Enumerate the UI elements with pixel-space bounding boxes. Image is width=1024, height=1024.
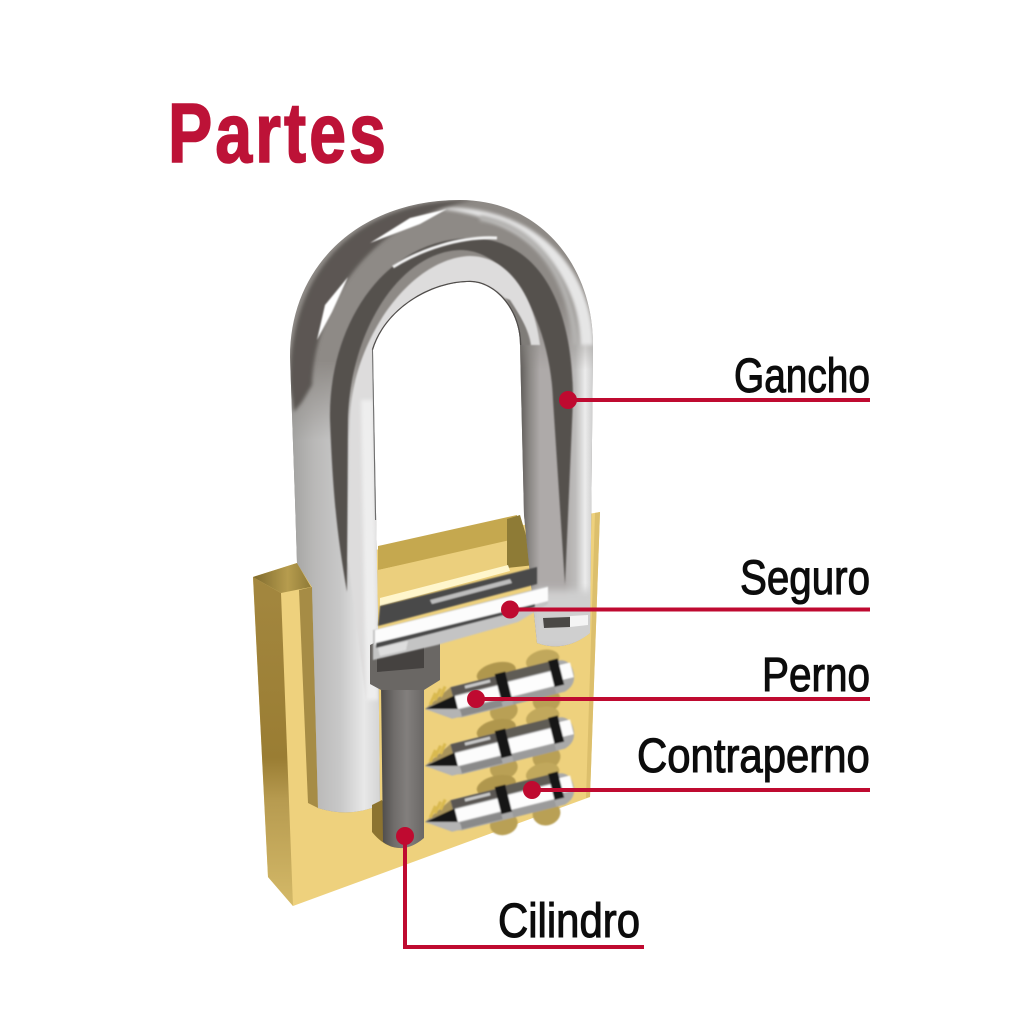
label: Perno: Perno (762, 649, 870, 702)
shackle (290, 200, 593, 812)
label: Gancho: Gancho (734, 350, 870, 403)
label: Cilindro: Cilindro (498, 895, 640, 948)
label: Contraperno: Contraperno (637, 730, 870, 783)
label: Contraperno (523, 730, 870, 799)
contraperno row (418, 757, 581, 854)
padlock body (253, 512, 600, 906)
middle pin row (418, 701, 581, 798)
label: Seguro: Seguro (740, 552, 870, 605)
pins (418, 644, 581, 854)
seguro bar (373, 567, 548, 660)
label: Cilindro (396, 827, 644, 948)
perno row (418, 644, 581, 741)
label: Perno (467, 649, 870, 708)
padlock illustration (253, 190, 610, 906)
title: Partes (168, 87, 389, 181)
label: Seguro (501, 552, 870, 618)
label: Gancho (559, 350, 870, 409)
cylinder (370, 625, 440, 848)
